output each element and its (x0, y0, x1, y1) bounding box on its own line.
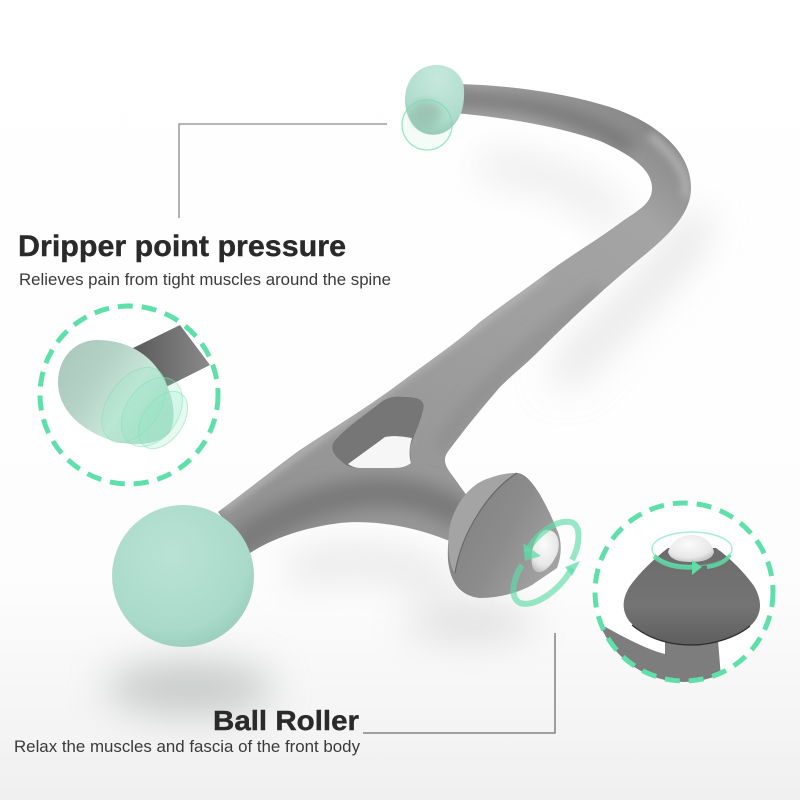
white ball (668, 535, 714, 562)
heading: ball roller: Ball Roller (213, 705, 359, 736)
roller head (448, 473, 561, 598)
pressure ripples (89, 356, 198, 458)
magnifier: ball roller (590, 502, 774, 690)
rotation arrows (652, 532, 732, 575)
large mint ball (112, 505, 254, 647)
tube (125, 325, 210, 395)
cone (624, 548, 760, 645)
dashed ring (595, 503, 773, 681)
callout line: ball roller (363, 633, 555, 733)
magnifier: dripper tip (39, 305, 219, 485)
callout line: dripper point (179, 124, 387, 218)
roller ball (532, 530, 559, 572)
description: ball roller: Relax the muscles and fascia of the front body (14, 738, 361, 756)
soft ground shadows (105, 165, 700, 714)
arm opening (332, 397, 424, 468)
arm and neck (602, 626, 720, 682)
mint cap (58, 340, 174, 444)
dashed ring (40, 306, 218, 484)
heading: dripper point pressure: Dripper point pressure (18, 230, 346, 263)
tip ball: top mint cap (402, 65, 464, 150)
rotation arrows on roller (514, 522, 580, 604)
description: dripper point: Relieves pain from tight muscles around the spine (19, 270, 391, 289)
product: neck massager tool (112, 65, 691, 647)
tool arm body (218, 84, 691, 553)
